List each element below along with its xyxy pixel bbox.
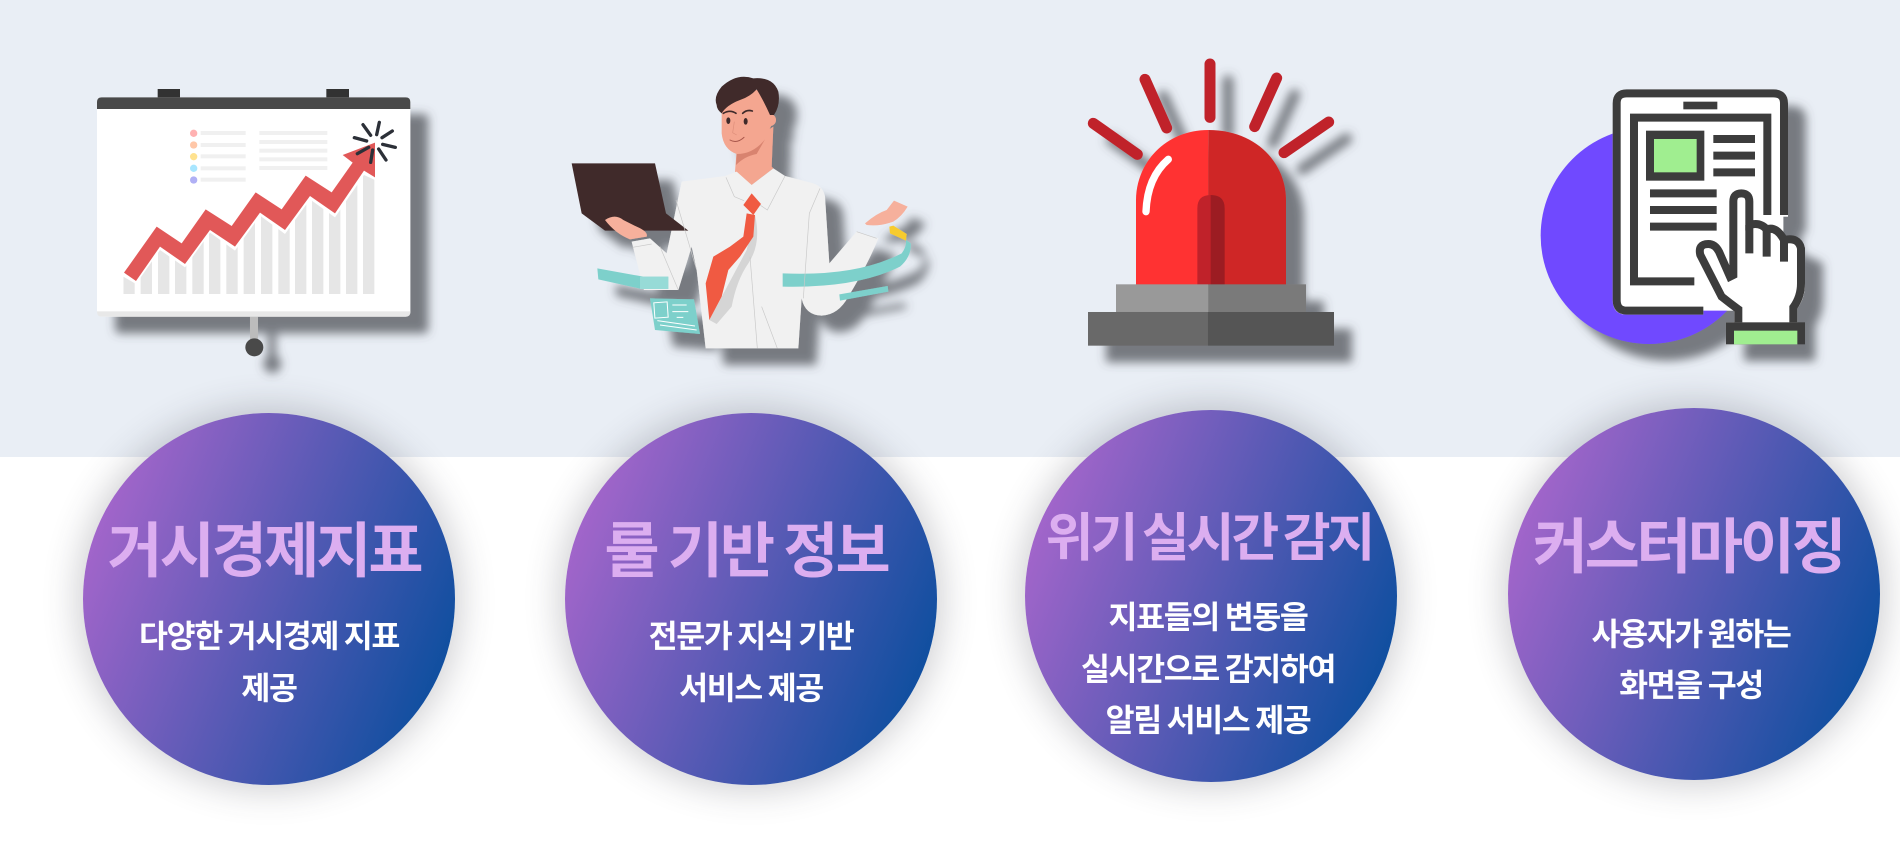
heading: crisis detection: 위기 실시간 감지 [1046,510,1372,568]
icon: businessman with laptop [572,77,911,348]
description: macro indicators line 2: 제공 [241,670,297,706]
description: customizing line 2: 화면을 구성 [1619,667,1763,703]
illustrations [97,58,1830,378]
description: rule based line 2: 서비스 제공 [679,670,823,706]
description: customizing line 1: 사용자가 원하는 [1592,616,1790,652]
background band [0,0,1900,457]
icon: presentation board with rising chart [97,89,410,356]
description: crisis line 3: 알림 서비스 제공 [1106,702,1310,738]
panel: customizing circle [1508,408,1880,780]
heading: customizing: 커스터마이징 [1533,514,1843,581]
panel: crisis detection circle [1025,410,1397,782]
icon: tablet with pointing hand [1541,89,1805,344]
heading: macro indicators: 거시경제지표 [107,518,421,585]
description: rule based line 1: 전문가 지식 기반 [649,618,853,654]
icon: red siren [1088,64,1334,346]
panel: rule based info circle [565,413,937,785]
description: crisis line 2: 실시간으로 감지하여 [1081,651,1335,687]
heading: rule based info: 룰 기반 정보 [604,518,888,585]
panel: macro indicators circle [83,413,455,785]
description: macro indicators line 1: 다양한 거시경제 지표 [139,618,399,654]
description: crisis line 1: 지표들의 변동을 [1109,599,1307,635]
